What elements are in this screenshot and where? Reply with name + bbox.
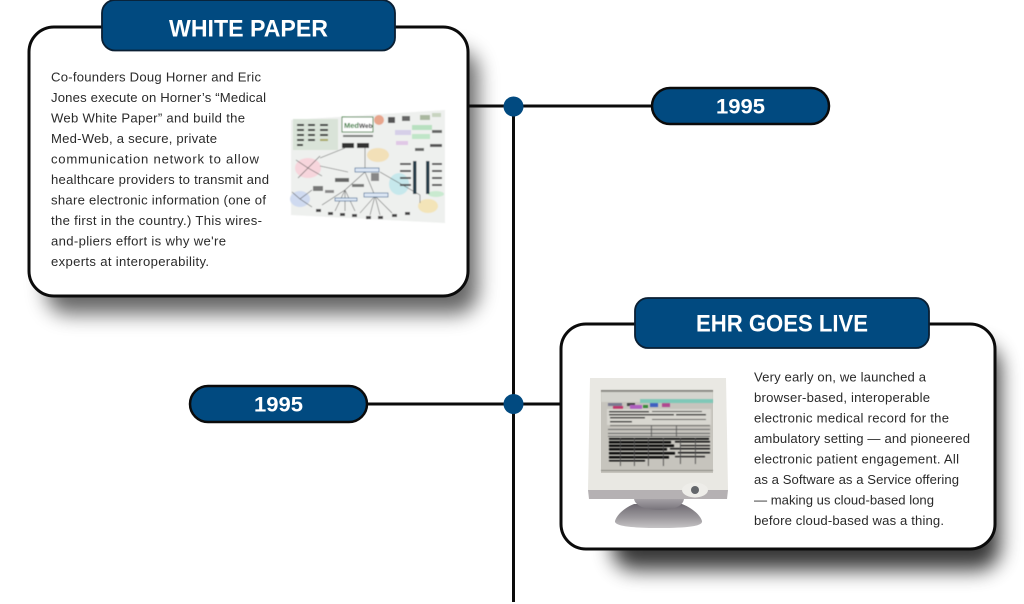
text block: white paper description: healthcare providers to transmit and [51, 172, 269, 187]
heading: white paper: WHITE PAPER [169, 16, 328, 42]
text block: EHR goes live description: as a Software as a Service offering [754, 472, 959, 487]
connector: white paper to 1995 [466, 104, 652, 108]
text block: white paper description: Co-founders Doug Horner and Eric [51, 70, 261, 84]
text block: EHR goes live description: before cloud-based was a thing. [754, 513, 944, 528]
image: Med-Web network diagram: Web [359, 123, 373, 130]
image: Med-Web network diagram [290, 110, 445, 223]
heading: white paper [102, 0, 395, 50]
text block: EHR goes live description: electronic patient engagement. All [754, 452, 959, 466]
monitor stand [615, 504, 702, 528]
connector: 1995 to EHR goes live [366, 402, 562, 406]
text block: EHR goes live description: Very early on, we launched a [754, 370, 927, 384]
image: Med-Web network diagram: Med [344, 121, 359, 130]
text block: EHR goes live description: ambulatory setting — and pioneered [754, 431, 970, 446]
text block: white paper description: communication network to allow [51, 152, 260, 166]
card body: EHR goes live [561, 324, 995, 549]
timeline node: second 1995 [504, 394, 524, 414]
year pill: 1995 left: 1995 [254, 394, 303, 416]
year pill: 1995 right: 1995 [716, 96, 765, 118]
text block: EHR goes live description [754, 370, 970, 528]
text block: white paper description: the first in the country.) This wires- [51, 213, 262, 228]
text block: EHR goes live description: — making us cloud-based long [754, 492, 934, 508]
text block: white paper description: Jones execute on Horner’s “Medical [51, 90, 266, 105]
monitor screen [601, 390, 713, 473]
text block: EHR goes live description: electronic medical record for the [754, 410, 949, 426]
monitor housing [588, 378, 728, 490]
panel: EHR goes live [366, 298, 1000, 570]
card body: white paper [29, 27, 468, 296]
heading: EHR goes live: EHR GOES LIVE [696, 310, 868, 338]
text block: EHR goes live description: browser-based, interoperable [754, 390, 930, 405]
year pill: 1995 right [652, 88, 829, 124]
year pill: 1995 left [190, 386, 367, 422]
monitor power button [682, 482, 708, 498]
image: CRT monitor with EHR screen [588, 378, 728, 528]
text block: white paper description: and-pliers effort is why we're [51, 234, 226, 248]
timeline node: first 1995 [504, 96, 524, 116]
card shadow: white paper [46, 50, 478, 314]
timeline spine [512, 106, 515, 602]
heading: EHR goes live [635, 298, 929, 348]
panel: white paper [29, 0, 652, 314]
text block: white paper description: Web White Paper” and build the [51, 110, 245, 126]
text block: white paper description [51, 70, 269, 269]
text block: white paper description: experts at interoperability. [51, 254, 209, 269]
text block: white paper description: share electronic information (one of [51, 192, 266, 208]
text block: white paper description: Med-Web, a secure, private [51, 131, 217, 146]
card shadow: EHR goes live [612, 345, 1000, 570]
